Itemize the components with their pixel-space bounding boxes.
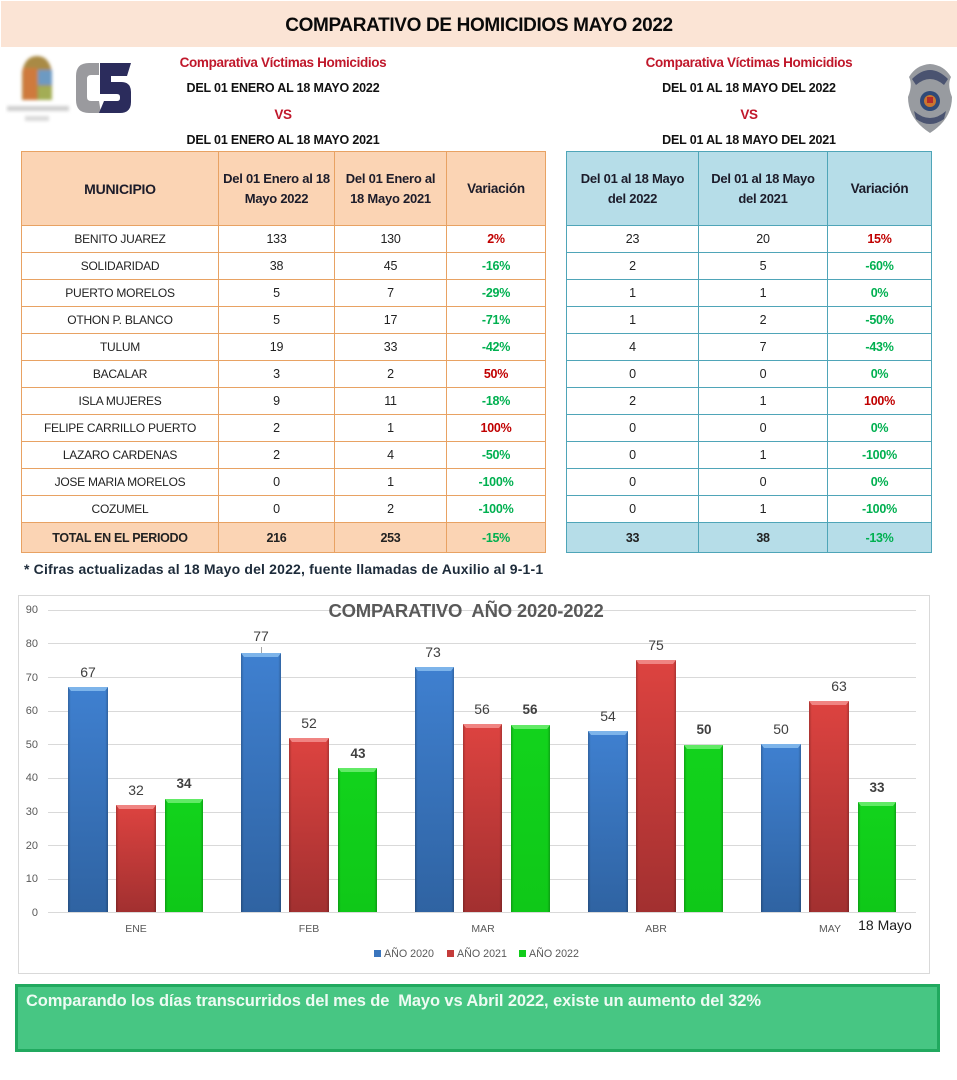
- row: Lazaro Cardenas: LAZARO CARDENAS: [63, 448, 177, 462]
- bars: FEB: [241, 653, 377, 912]
- row: Lazaro Cardenas: 4: [387, 448, 394, 462]
- title: [1, 1, 957, 47]
- legend: [374, 947, 579, 960]
- bars: MAY: [761, 701, 896, 912]
- icon: police badge: [908, 64, 952, 133]
- row: Isla Mujeres May: 1: [760, 394, 766, 408]
- value labels: 50: [773, 721, 789, 737]
- row: Isla Mujeres May: [629, 394, 895, 408]
- row: Cozumel May: 1: [760, 502, 766, 516]
- value labels: 33: [869, 780, 885, 795]
- row: Puerto Morelos May: 1: [629, 286, 636, 300]
- left vs: VS: [274, 107, 292, 122]
- bar chart: comparison 2020-2022: [18, 595, 930, 974]
- row: Othon P. Blanco: 17: [384, 313, 397, 327]
- header row: Del 01 Enero al 18 Mayo 2022: [223, 170, 330, 206]
- row: Puerto Morelos: 5: [273, 286, 280, 300]
- row: Solidaridad: [81, 259, 510, 273]
- table: May comparison: [566, 151, 932, 553]
- total row: 216: [267, 530, 286, 544]
- row: Jose Maria Morelos May: [629, 475, 888, 489]
- category labels: ENE: [125, 923, 147, 935]
- row: Lazaro Cardenas: -50%: [482, 448, 510, 462]
- row: Tulum: -42%: [482, 340, 510, 354]
- bars: MAR: [415, 667, 550, 912]
- value labels: 63: [831, 678, 847, 694]
- right period 2022: DEL 01 AL 18 MAYO DEL 2022: [662, 81, 836, 95]
- row: Felipe Carrillo Puerto May: 0: [760, 421, 766, 435]
- chart title: COMPARATIVO AÑO 2020-2022: [328, 600, 604, 621]
- row: Benito Juarez: 133: [266, 232, 287, 246]
- row: Jose Maria Morelos: -100%: [479, 475, 513, 489]
- row: Solidaridad May: 5: [760, 259, 766, 273]
- row: Puerto Morelos: 7: [387, 286, 394, 300]
- row: Puerto Morelos May: 1: [760, 286, 766, 300]
- y axis labels: 90: [26, 604, 38, 616]
- row: Tulum: TULUM: [100, 340, 140, 354]
- row: Othon P. Blanco: 5: [273, 313, 280, 327]
- callout: [15, 984, 940, 1052]
- right period 2021: DEL 01 AL 18 MAYO DEL 2021: [662, 133, 836, 147]
- bars: ABR: [588, 660, 723, 912]
- row: Cozumel: COZUMEL: [92, 502, 148, 516]
- row: Bacalar: 3: [273, 367, 280, 381]
- header row: Del 01 al 18 Mayo: [581, 170, 684, 186]
- total row: 33: [626, 530, 639, 544]
- row: Bacalar May: 0: [629, 367, 636, 381]
- row: Othon P. Blanco May: [629, 313, 894, 327]
- header row: 18 Mayo 2021: [350, 190, 431, 206]
- value labels: 77: [253, 628, 269, 644]
- right subtitle: Comparativa Víctimas Homicidios: [646, 55, 852, 70]
- row: Jose Maria Morelos: 1: [387, 475, 394, 489]
- row: Lazaro Cardenas May: -100%: [862, 448, 897, 462]
- category labels: FEB: [299, 923, 319, 935]
- row: Solidaridad: 38: [270, 259, 283, 273]
- row: Felipe Carrillo Puerto May: 0: [629, 421, 636, 435]
- row: Benito Juarez May: [626, 232, 892, 246]
- row: Bacalar May: 0: [760, 367, 766, 381]
- row: Puerto Morelos May: [629, 286, 888, 300]
- row: Benito Juarez: [74, 232, 505, 246]
- value labels: 54: [600, 708, 616, 724]
- row: Solidaridad: SOLIDARIDAD: [81, 259, 159, 273]
- row: Bacalar May: [629, 367, 888, 381]
- row: Solidaridad May: -60%: [865, 259, 894, 273]
- row: Isla Mujeres: -18%: [482, 394, 510, 408]
- row: Tulum May: 4: [629, 340, 636, 354]
- row: Cozumel May: -100%: [862, 502, 897, 516]
- row: Solidaridad May: 2: [629, 259, 636, 273]
- row: Lazaro Cardenas May: [629, 448, 897, 462]
- row: Felipe Carrillo Puerto: 100%: [480, 421, 511, 435]
- total row: TOTAL EN EL PERIODO: [52, 530, 188, 544]
- row: Cozumel: 2: [387, 502, 394, 516]
- row: Bacalar May: 0%: [871, 367, 888, 381]
- row: Lazaro Cardenas May: 1: [760, 448, 766, 462]
- header row: Variación: [851, 180, 908, 196]
- right subheading block: [646, 55, 852, 147]
- value labels: 34: [176, 776, 192, 791]
- y axis labels: 70: [26, 672, 38, 684]
- row: Cozumel: -100%: [479, 502, 513, 516]
- y axis labels: 50: [26, 739, 38, 751]
- total row: [567, 523, 931, 552]
- header row: del 2022: [608, 190, 657, 206]
- row: Othon P. Blanco May: 1: [629, 313, 636, 327]
- value labels: 73: [425, 644, 441, 660]
- row: Othon P. Blanco May: 2: [760, 313, 766, 327]
- row: Jose Maria Morelos May: 0: [629, 475, 636, 489]
- category labels: MAY: [819, 923, 841, 935]
- total row: 38: [756, 530, 770, 544]
- header row: Variación: [467, 180, 525, 196]
- row: Tulum: 19: [270, 340, 283, 354]
- row: Cozumel: [92, 502, 514, 516]
- row: Bacalar: 50%: [484, 367, 508, 381]
- row: Cozumel May: [629, 502, 897, 516]
- row: Jose Maria Morelos May: 0%: [871, 475, 888, 489]
- row: Felipe Carrillo Puerto May: 0%: [871, 421, 888, 435]
- value labels: 56: [522, 702, 538, 717]
- value labels: 43: [350, 746, 366, 761]
- y axis labels: [26, 604, 38, 919]
- row: Isla Mujeres: [78, 394, 510, 408]
- row: Jose Maria Morelos: 0: [273, 475, 280, 489]
- y axis labels: 60: [26, 705, 38, 717]
- value labels: 56: [474, 701, 490, 717]
- legend: AÑO 2020: [384, 947, 434, 960]
- header row: del 2021: [738, 190, 788, 206]
- row: Tulum: [100, 340, 510, 354]
- left period 2021: DEL 01 ENERO AL 18 MAYO 2021: [187, 133, 379, 147]
- row: Cozumel: 0: [273, 502, 280, 516]
- row: Jose Maria Morelos: [54, 475, 514, 489]
- row: Felipe Carrillo Puerto: 1: [387, 421, 394, 435]
- header row: MUNICIPIO: [84, 180, 156, 196]
- row: Othon P. Blanco May: -50%: [865, 313, 894, 327]
- row: Bacalar: BACALAR: [93, 367, 147, 381]
- row: Felipe Carrillo Puerto: 2: [273, 421, 280, 435]
- row: Isla Mujeres: 9: [273, 394, 280, 408]
- row: Tulum May: -43%: [865, 340, 894, 354]
- row: Benito Juarez: BENITO JUAREZ: [74, 232, 166, 246]
- row: Isla Mujeres: ISLA MUJERES: [78, 394, 162, 408]
- row: Solidaridad: 45: [384, 259, 397, 273]
- row: Lazaro Cardenas May: 0: [629, 448, 636, 462]
- category labels: ABR: [645, 923, 667, 935]
- value labels: 32: [128, 782, 144, 798]
- row: Jose Maria Morelos May: 0: [760, 475, 766, 489]
- annotation: 18 Mayo: 18 Mayo: [858, 917, 912, 933]
- legend: AÑO 2022: [529, 947, 579, 960]
- y axis labels: 30: [26, 806, 38, 818]
- row: Isla Mujeres: 11: [384, 394, 397, 408]
- header row: [22, 152, 545, 552]
- left subtitle: Comparativa Víctimas Homicidios: [180, 55, 386, 70]
- header row: Del 01 al 18 Mayo: [711, 170, 815, 186]
- left subheading block: [180, 55, 386, 147]
- row: Puerto Morelos: PUERTO MORELOS: [65, 286, 175, 300]
- row: Othon P. Blanco: OTHON P. BLANCO: [67, 313, 173, 327]
- total row: -15%: [482, 530, 510, 544]
- row: Puerto Morelos: -29%: [482, 286, 510, 300]
- row: Benito Juarez May: 23: [626, 232, 639, 246]
- row: Jose Maria Morelos: JOSE MARIA MORELOS: [55, 475, 185, 489]
- value labels: [80, 628, 885, 798]
- row: Felipe Carrillo Puerto: FELIPE CARRILLO PUERTO: [44, 421, 196, 435]
- y axis labels: 40: [26, 772, 38, 784]
- value labels: 50: [696, 722, 712, 737]
- value labels: 52: [301, 715, 317, 731]
- row: Puerto Morelos May: 0%: [871, 286, 888, 300]
- row: Benito Juarez May: 15%: [867, 232, 892, 246]
- header row: [567, 152, 931, 552]
- row: Tulum May: 7: [760, 340, 766, 354]
- row: Isla Mujeres May: 2: [629, 394, 636, 408]
- row: Benito Juarez May: 20: [756, 232, 770, 246]
- title: COMPARATIVO DE HOMICIDIOS MAYO 2022: [285, 15, 673, 36]
- y axis labels: 80: [26, 638, 38, 650]
- row: Puerto Morelos: [65, 286, 510, 300]
- row: Isla Mujeres May: 100%: [864, 394, 895, 408]
- total row: 253: [381, 530, 400, 544]
- y axis labels: 10: [26, 873, 38, 885]
- row: Lazaro Cardenas: 2: [273, 448, 280, 462]
- row: Solidaridad: -16%: [482, 259, 510, 273]
- row: Solidaridad May: [629, 259, 894, 273]
- row: Tulum: 33: [384, 340, 397, 354]
- y axis labels: 0: [32, 907, 38, 919]
- row: Benito Juarez: 130: [380, 232, 401, 246]
- icon: C5 logo: [76, 63, 131, 113]
- row: Benito Juarez: 2%: [487, 232, 505, 246]
- y axis labels: 20: [26, 840, 38, 852]
- value labels: 75: [648, 637, 664, 653]
- category labels: [125, 923, 841, 935]
- row: Othon P. Blanco: -71%: [482, 313, 510, 327]
- row: Cozumel May: 0: [629, 502, 636, 516]
- row: Othon P. Blanco: [67, 313, 510, 327]
- bars: ENE: [68, 687, 203, 912]
- callout: Comparando los días transcurridos del mes de Mayo vs Abril 2022, existe un aumento del 32%: [26, 992, 761, 1010]
- chart frame: [18, 596, 930, 974]
- row: Bacalar: [93, 367, 508, 381]
- icon: state coat of arms logo: [6, 53, 70, 122]
- table: year to date by municipality: [21, 151, 546, 553]
- row: Felipe Carrillo Puerto: [44, 421, 512, 435]
- right vs: VS: [740, 107, 758, 122]
- row: Lazaro Cardenas: [63, 448, 510, 462]
- row: Tulum May: [629, 340, 894, 354]
- header row: Del 01 Enero al: [346, 170, 435, 186]
- row: Felipe Carrillo Puerto May: [629, 421, 888, 435]
- value labels: 67: [80, 664, 96, 680]
- row: Bacalar: 2: [387, 367, 394, 381]
- total row: -13%: [866, 530, 893, 544]
- total row: [22, 523, 545, 552]
- category labels: MAR: [471, 923, 495, 935]
- footnote: * Cifras actualizadas al 18 Mayo del 2022, fuente llamadas de Auxilio al 9-1-1: [24, 561, 543, 577]
- left period 2022: DEL 01 ENERO AL 18 MAYO 2022: [187, 81, 379, 95]
- legend: AÑO 2021: [457, 947, 507, 960]
